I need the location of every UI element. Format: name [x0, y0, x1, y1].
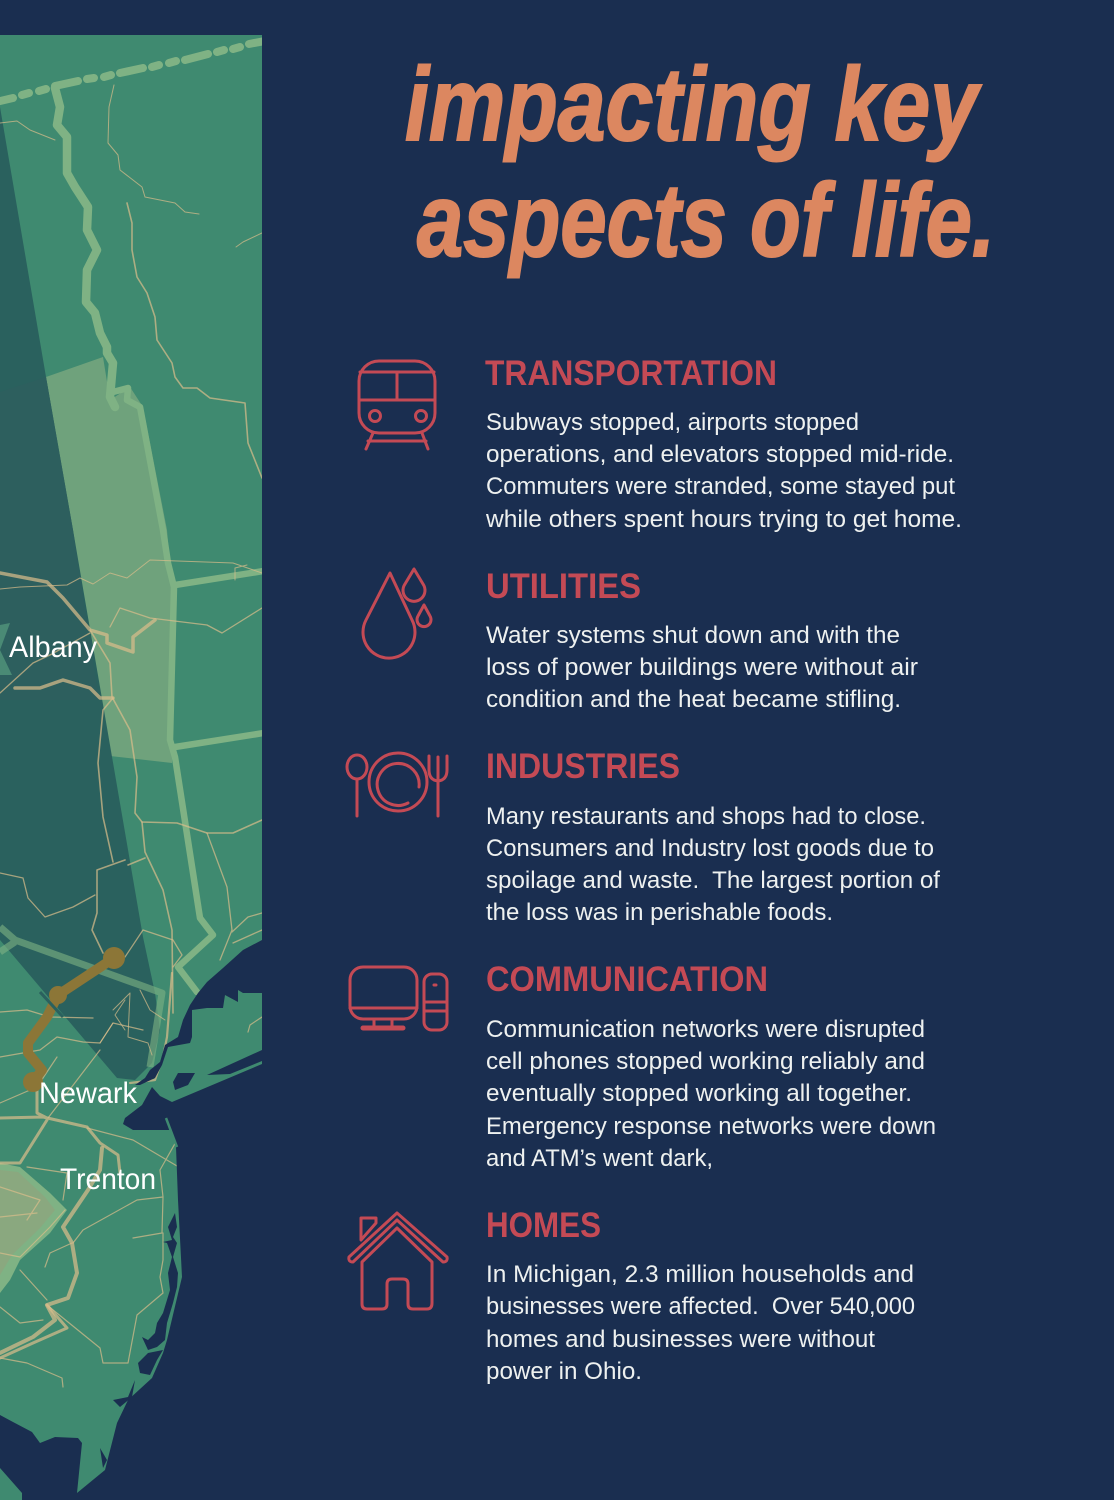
label: Albany: Albany — [9, 631, 97, 664]
barrier beach and sandy hook — [166, 1118, 177, 1147]
section: utilities — [363, 567, 918, 713]
section: homes — [349, 1206, 915, 1385]
body text — [485, 409, 962, 533]
body text: loss of power buildings were without air — [486, 654, 918, 681]
body text — [486, 1016, 936, 1172]
icon: house — [349, 1213, 447, 1309]
label: Newark: Newark — [39, 1077, 138, 1110]
heading: INDUSTRIES — [486, 747, 680, 786]
title — [405, 47, 995, 279]
body text: eventually stopped working all together. — [486, 1080, 912, 1107]
body text: spoilage and waste. The largest portion of — [486, 867, 940, 894]
body text: Subways stopped, airports stopped — [486, 409, 859, 436]
section: transportation — [359, 354, 962, 533]
land — [0, 35, 262, 1500]
jersey shore lagoons — [100, 1213, 178, 1468]
light shaded outage region — [46, 357, 172, 763]
water: sound and narrows — [135, 940, 262, 1085]
body text: operations, and elevators stopped mid-ride. — [486, 441, 954, 468]
body text: Many restaurants and shops had to close. — [486, 803, 926, 830]
icon: desktop computer — [350, 967, 447, 1030]
heading: COMMUNICATION — [486, 960, 768, 999]
body text: In Michigan, 2.3 million households and — [486, 1261, 914, 1288]
body text — [486, 803, 940, 926]
icon: plate and cutlery — [347, 753, 447, 816]
icon: water drops — [363, 569, 431, 658]
body text: businesses were affected. Over 540,000 — [486, 1293, 915, 1320]
label: Trenton: Trenton — [60, 1163, 156, 1196]
heading: UTILITIES — [486, 567, 641, 606]
dark shaded wedge — [0, 107, 160, 1080]
body text: Communication networks were disrupted — [486, 1016, 925, 1043]
water: ocean and lower bay — [0, 1064, 262, 1500]
body text — [486, 622, 918, 713]
section: industries — [347, 747, 940, 926]
lake shape — [0, 623, 12, 675]
body text: homes and businesses were without — [486, 1326, 875, 1353]
water: long island lagoons — [173, 1050, 262, 1090]
body text: condition and the heat became stifling. — [486, 686, 901, 713]
body text: Consumers and Industry lost goods due to — [486, 835, 934, 862]
icon: train — [359, 361, 435, 449]
lower shaded outage inner — [0, 1170, 55, 1275]
body text: power in Ohio. — [486, 1358, 642, 1385]
heading: HOMES — [486, 1206, 601, 1245]
lower shaded outage region — [0, 1163, 67, 1293]
body text: Emergency response networks were down — [486, 1113, 936, 1140]
wedge edge mark — [40, 992, 63, 1017]
state borders — [0, 40, 270, 1067]
body text: and ATM’s went dark, — [486, 1145, 713, 1172]
wedge upper tint — [46, 378, 74, 538]
body text: Commuters were stranded, some stayed put — [486, 473, 955, 500]
body text: Water systems shut down and with the — [486, 622, 900, 649]
body text — [486, 1261, 915, 1385]
body text: the loss was in perishable foods. — [486, 899, 833, 926]
rivers and transmission lines — [0, 85, 262, 1387]
panel: map of the northeast — [0, 35, 270, 1500]
section: communication — [350, 960, 936, 1172]
heading: TRANSPORTATION — [485, 354, 777, 393]
body text: while others spent hours trying to get home. — [485, 506, 962, 533]
body text: cell phones stopped working reliably and — [486, 1048, 925, 1075]
title: impacting key — [405, 47, 982, 163]
brown blackout path — [23, 947, 125, 1092]
